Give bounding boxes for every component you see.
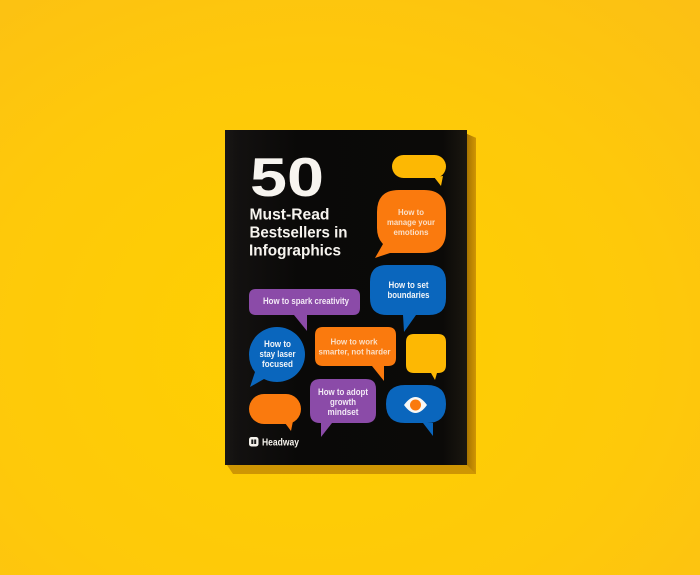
book shadow [227,134,476,474]
speech bubble: manage your emotions: manage your [387,217,436,227]
speech bubble: how to stay laser focused: How to [264,339,292,349]
speech bubble: empty yellow square [406,334,446,380]
speech bubble: manage your emotions [375,190,446,258]
logo: Headway [249,437,299,448]
title text: Infographics [249,242,341,260]
speech bubble: how to adopt growth mindset: growth [330,397,356,407]
speech bubble: how to set boundaries: How to set [388,280,429,290]
speech bubble: how to stay laser focused: stay laser [260,349,296,359]
speech bubble: how to spark creativity [249,289,360,331]
title number: 50 [250,146,324,208]
speech bubble: how to work smarter: smarter, not harder [318,346,391,356]
speech bubble: manage your emotions: emotions [394,227,429,237]
speech bubble: manage your emotions: How to [398,207,424,217]
speech bubble: how to set boundaries [370,265,446,332]
speech bubble: how to set boundaries: boundaries [388,290,430,300]
speech bubble: empty orange [249,394,301,431]
speech bubble: how to spark creativity: How to spark creativity [263,296,349,306]
speech bubble: how to adopt growth mindset: How to adopt [318,387,368,397]
title text [249,206,348,260]
speech bubble: how to work smarter: How to work [330,336,378,346]
speech bubble: how to adopt growth mindset [310,379,376,437]
speech bubble: how to work smarter [315,327,396,381]
speech bubble: eye icon [386,385,446,436]
title text: Must-Read [250,206,330,224]
speech bubble: how to adopt growth mindset: mindset [328,407,359,417]
logo: Headway: Headway [262,438,299,448]
icon: eye [404,397,427,413]
speech bubble: how to stay laser focused [249,327,305,387]
speech bubble: empty yellow [392,155,446,186]
book cover [225,130,467,465]
speech bubble: how to stay laser focused: focused [262,359,293,369]
title text: Bestsellers in [250,224,348,242]
